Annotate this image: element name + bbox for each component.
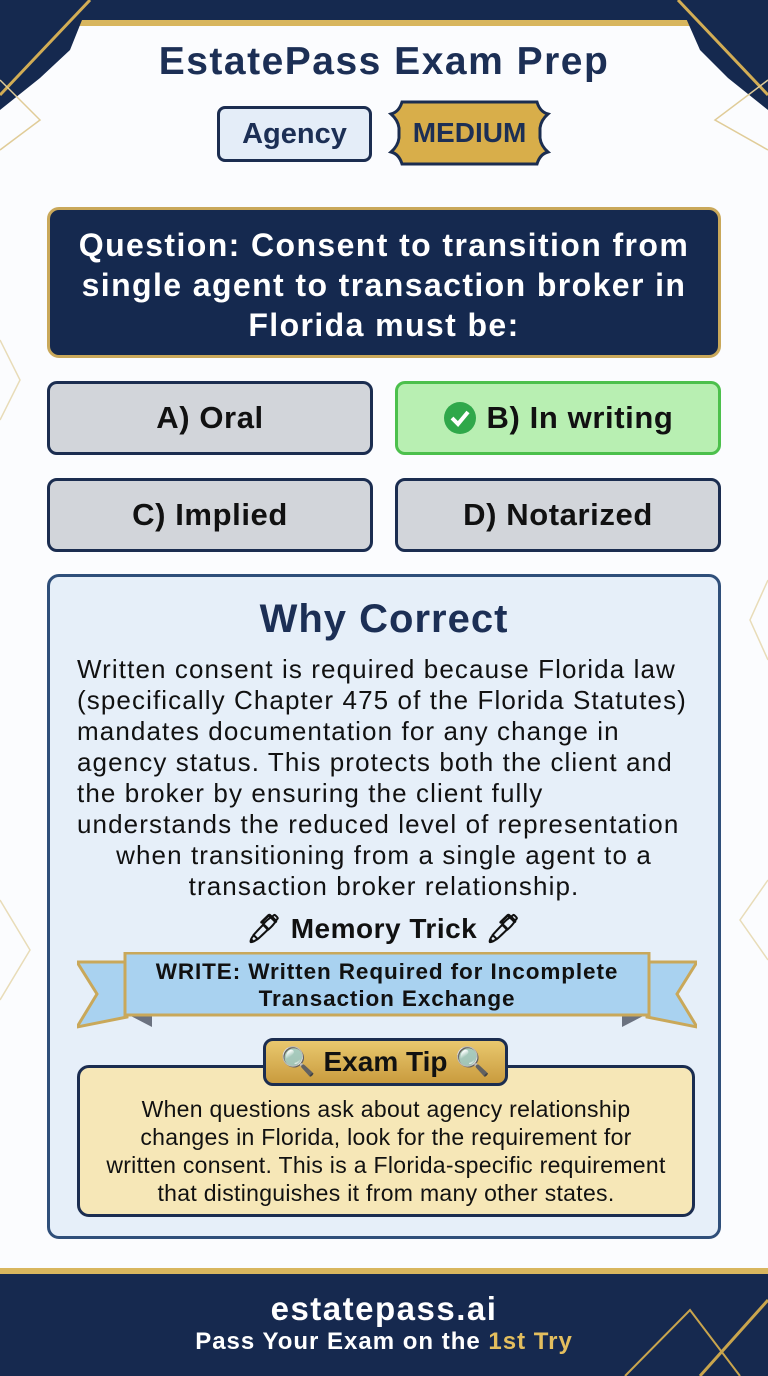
badge: Medium: MEDIUM — [413, 117, 526, 148]
ribbon: WRITE: Written Required for Incomplete — [156, 959, 618, 984]
title: EstatePass Exam Prep — [159, 40, 609, 83]
footer tagline: Pass Your Exam on the 1st Try — [195, 1328, 573, 1355]
ribbon — [77, 952, 697, 1028]
question box: Question: Consent to transition from — [79, 227, 689, 263]
question box: single agent to transaction broker in — [82, 267, 686, 303]
footer url: estatepass.ai — [271, 1290, 497, 1327]
option B correct: B) In writing — [487, 400, 673, 435]
exam tip label — [263, 1038, 508, 1086]
icon: check — [444, 402, 476, 434]
question box — [47, 207, 721, 358]
explanation text: mandates documentation for any change in — [77, 716, 620, 746]
option A: A) Oral — [156, 400, 264, 435]
exam tip box — [77, 1065, 695, 1217]
explanation text: when transitioning from a single agent to a — [116, 840, 652, 870]
option B correct — [395, 381, 721, 455]
option C — [47, 478, 373, 552]
badge: Agency: Agency — [242, 118, 347, 150]
explanation text: agency status. This protects both the client and — [77, 747, 673, 777]
option D: D) Notarized — [463, 497, 653, 532]
explanation text — [77, 654, 687, 901]
option A — [47, 381, 373, 455]
explanation text: transaction broker relationship. — [189, 871, 579, 901]
option D — [395, 478, 721, 552]
explanation text: Written consent is required because Florida law — [77, 654, 676, 684]
footer — [195, 1290, 573, 1355]
exam tip box: written consent. This is a Florida-specific requirement — [106, 1152, 666, 1178]
heading: Why Correct — [260, 597, 508, 641]
badge: Agency — [217, 106, 372, 162]
explanation text: the broker by ensuring the client fully — [77, 778, 543, 808]
question box: Florida must be: — [248, 307, 520, 343]
panel: why correct — [47, 574, 721, 1239]
ribbon: Transaction Exchange — [259, 986, 515, 1011]
memory trick heading: 🖊 Memory Trick 🖊 — [246, 913, 522, 944]
exam tip box: When questions ask about agency relationship — [142, 1096, 630, 1122]
explanation text: (specifically Chapter 475 of the Florida Statutes) — [77, 685, 687, 715]
option C: C) Implied — [132, 497, 288, 532]
explanation text: understands the reduced level of representation — [77, 809, 679, 839]
exam tip box: that distinguishes it from many other states. — [157, 1180, 615, 1206]
exam tip box: changes in Florida, look for the requirement for — [140, 1124, 632, 1150]
badge: Medium — [388, 100, 551, 166]
exam tip label: 🔍 Exam Tip 🔍 — [281, 1046, 490, 1077]
